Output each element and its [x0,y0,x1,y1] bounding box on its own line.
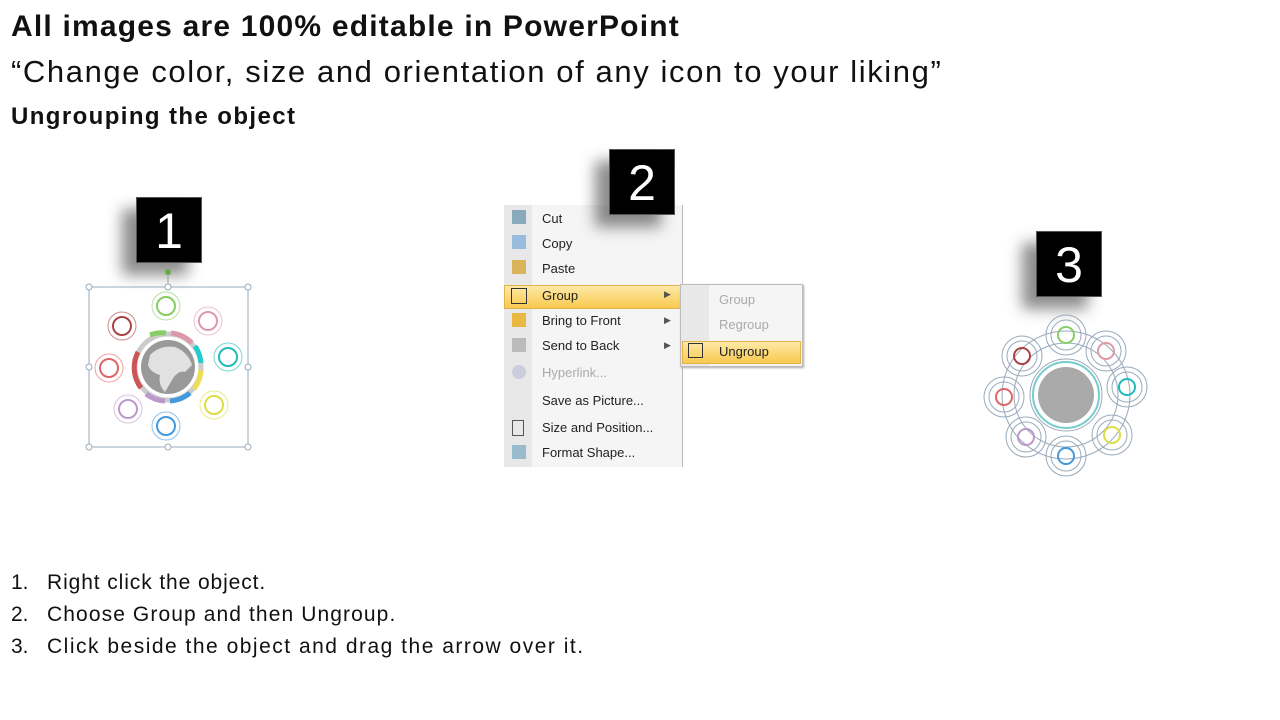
context menu: Hyperlink... [542,365,607,380]
context menu: Group [542,288,578,303]
context menu [504,205,683,467]
step 2 badge [609,149,675,215]
instructions list [11,571,585,658]
instructions list: 2. [11,603,29,626]
step 1 badge [136,197,202,263]
figure 3: ungrouped diagram [984,314,1148,476]
section heading: Ungrouping the object [11,103,296,130]
context menu: Size and Position... [542,420,653,435]
context menu: Copy [542,236,572,251]
context menu: ▶ [664,315,671,325]
context menu: Format Shape... [542,445,635,460]
submenu: Group [719,292,755,307]
context menu: Cut [542,211,562,226]
submenu: Ungroup [719,344,769,359]
instructions list: Right click the object. [47,571,266,594]
step 2 badge: 2 [628,155,656,211]
instructions list: 1. [11,571,29,594]
step 3 badge: 3 [1055,237,1083,293]
instructions list: 3. [11,635,29,658]
submenu [680,284,803,367]
context menu: Send to Back [542,338,619,353]
context menu: Bring to Front [542,313,621,328]
context menu: Paste [542,261,575,276]
step 1 badge: 1 [155,203,183,259]
submenu: Regroup [719,317,769,332]
step 3 badge [1036,231,1102,297]
instructions list: Click beside the object and drag the arrow over it. [47,635,585,658]
instructions list: Choose Group and then Ungroup. [47,603,396,626]
figure 1: grouped globe diagram [86,269,252,450]
context menu: ▶ [664,289,671,299]
context menu: Save as Picture... [542,393,644,408]
context menu: ▶ [664,340,671,350]
title: All images are 100% editable in PowerPoint [11,10,680,43]
subtitle: “Change color, size and orientation of any icon to your liking” [11,54,942,89]
